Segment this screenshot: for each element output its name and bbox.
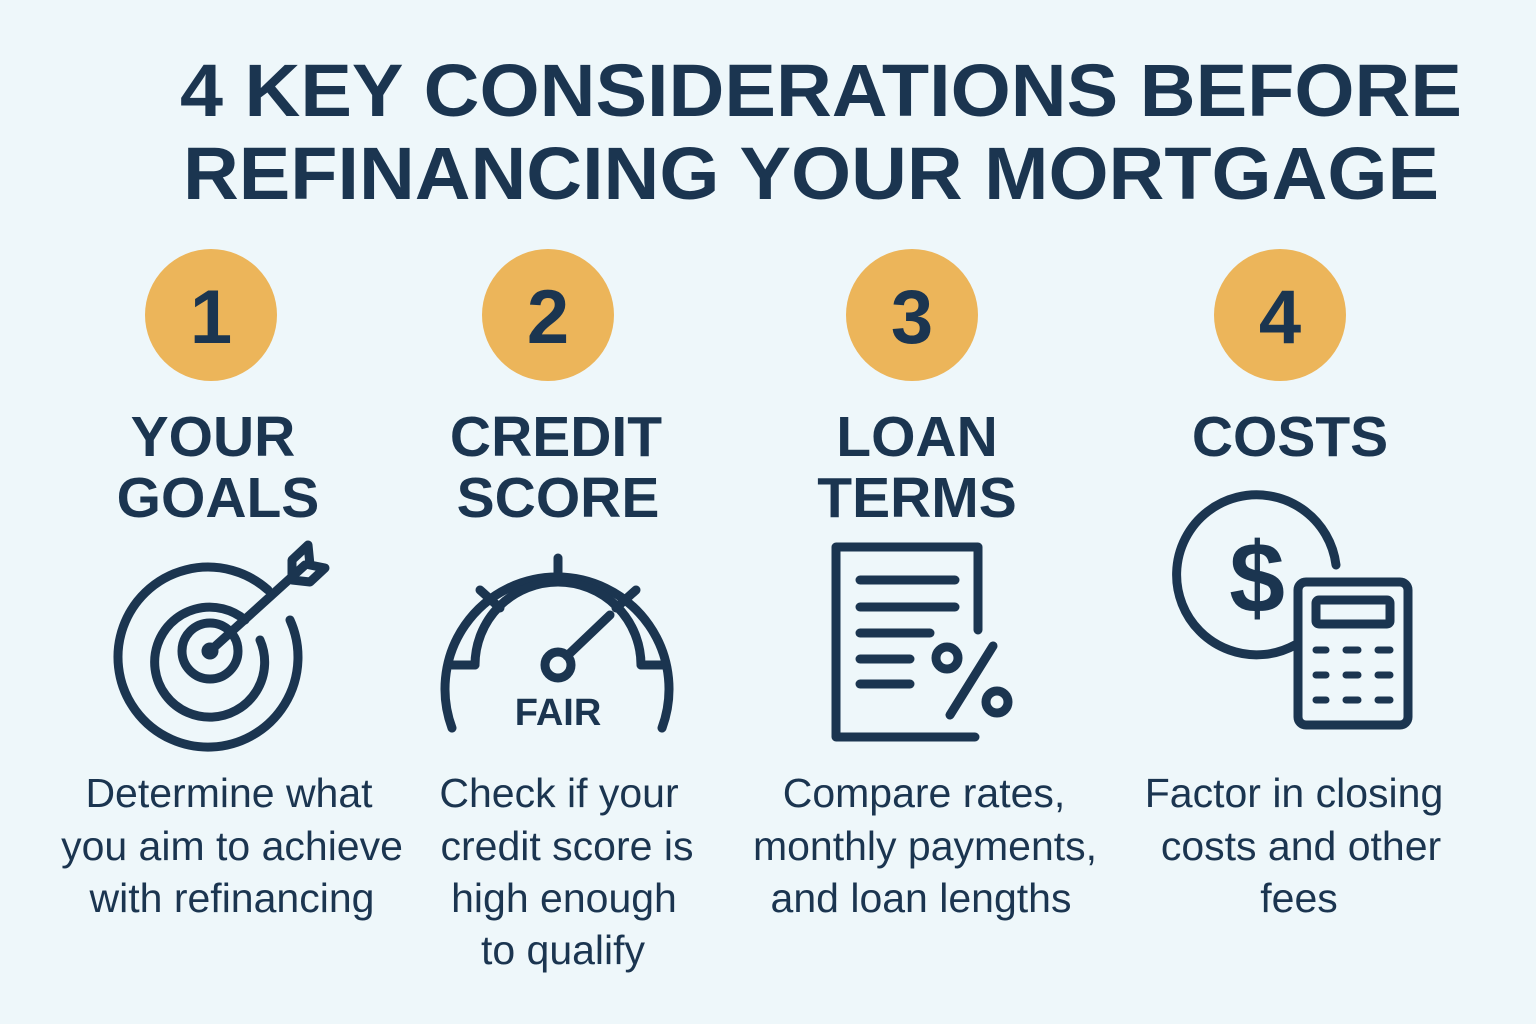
description: fees [1260, 875, 1338, 921]
description: Compare rates, [783, 770, 1065, 816]
description [439, 770, 693, 973]
heading: loan terms [817, 405, 1017, 530]
icon: document with percent [836, 547, 1008, 737]
number badge 3: 3 [891, 275, 933, 360]
heading: credit score [450, 405, 662, 530]
number badge 1 [145, 249, 277, 381]
description [61, 770, 403, 921]
heading: your goals: GOALS [117, 466, 319, 530]
description: monthly payments, [753, 823, 1097, 869]
icon: gauge [445, 558, 669, 728]
description: Factor in closing [1145, 770, 1443, 816]
number badge 4: 4 [1259, 275, 1301, 360]
heading: loan terms: TERMS [817, 466, 1017, 530]
panel: costs [1145, 249, 1443, 921]
heading: credit score: CREDIT [450, 405, 662, 469]
description: high enough [451, 875, 677, 921]
description: you aim to achieve [61, 823, 403, 869]
number badge 4 [1214, 249, 1346, 381]
number badge 1: 1 [190, 275, 232, 360]
panel: credit score [439, 249, 693, 973]
panel: loan terms [753, 249, 1097, 921]
description: and loan lengths [771, 875, 1071, 921]
icon: target [118, 545, 325, 747]
description: costs and other [1161, 823, 1441, 869]
title: REFINANCING YOUR MORTGAGE [183, 132, 1439, 215]
title: 4 KEY CONSIDERATIONS BEFORE [180, 49, 1462, 132]
heading: credit score: SCORE [457, 466, 659, 530]
panel: your goals [61, 249, 403, 921]
icon: coin and calculator [1177, 495, 1408, 725]
icon: coin and calculator: $ [1229, 522, 1285, 634]
heading: your goals: YOUR [131, 405, 295, 469]
description: credit score is [441, 823, 693, 869]
heading: costs: COSTS [1192, 405, 1388, 469]
heading: your goals [117, 405, 319, 530]
description [1145, 770, 1443, 921]
title [180, 49, 1462, 215]
description: with refinancing [89, 875, 374, 921]
description: Check if your [439, 770, 679, 816]
heading: loan terms: LOAN [836, 405, 998, 469]
description: to qualify [481, 927, 646, 973]
description [753, 770, 1097, 921]
number badge 3 [846, 249, 978, 381]
number badge 2 [482, 249, 614, 381]
panel: credit score: FAIR [515, 692, 601, 734]
description: Determine what [85, 770, 373, 816]
number badge 2: 2 [527, 275, 569, 360]
